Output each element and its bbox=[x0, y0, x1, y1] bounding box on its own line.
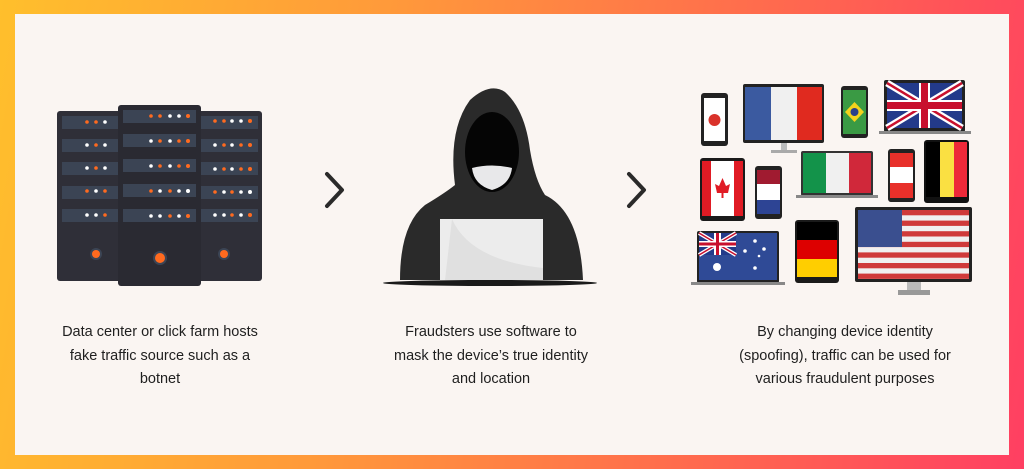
text block: data center caption: fake traffic source such as a bbox=[70, 348, 250, 364]
France monitor bbox=[743, 84, 824, 153]
UK laptop bbox=[879, 80, 971, 134]
text block: fraudster caption bbox=[394, 324, 588, 387]
text block: spoofing caption: various fraudulent purposes bbox=[756, 371, 934, 387]
Japan phone bbox=[701, 93, 728, 146]
arrow: step 1 to 2 bbox=[327, 174, 342, 206]
text block: spoofing caption: (spoofing), traffic can be used for bbox=[739, 348, 951, 364]
text block: fraudster caption: and location bbox=[452, 371, 530, 387]
icon: server racks bbox=[57, 105, 262, 286]
text block: spoofing caption: By changing device identity bbox=[757, 324, 933, 340]
Belgium tablet bbox=[924, 140, 969, 203]
Italy laptop bbox=[796, 151, 878, 198]
Canada tablet bbox=[700, 158, 745, 221]
text block: fraudster caption: Fraudsters use software to bbox=[405, 324, 577, 340]
arrow: step 2 to 3 bbox=[629, 174, 644, 206]
text block: fraudster caption: mask the device’s true identity bbox=[394, 348, 588, 364]
icon: devices with flags bbox=[691, 80, 972, 295]
text block: data center caption: Data center or click farm hosts bbox=[62, 324, 258, 340]
Netherlands phone bbox=[755, 166, 782, 219]
Austria phone bbox=[888, 149, 915, 202]
text block: spoofing caption bbox=[739, 324, 951, 387]
Germany tablet bbox=[795, 220, 839, 283]
text block: data center caption bbox=[62, 324, 258, 387]
Australia laptop bbox=[691, 231, 785, 285]
USA monitor bbox=[855, 207, 972, 295]
text block: data center caption: botnet bbox=[140, 371, 180, 387]
icon: hooded hacker with laptop bbox=[383, 88, 597, 286]
Brazil phone bbox=[841, 86, 868, 138]
